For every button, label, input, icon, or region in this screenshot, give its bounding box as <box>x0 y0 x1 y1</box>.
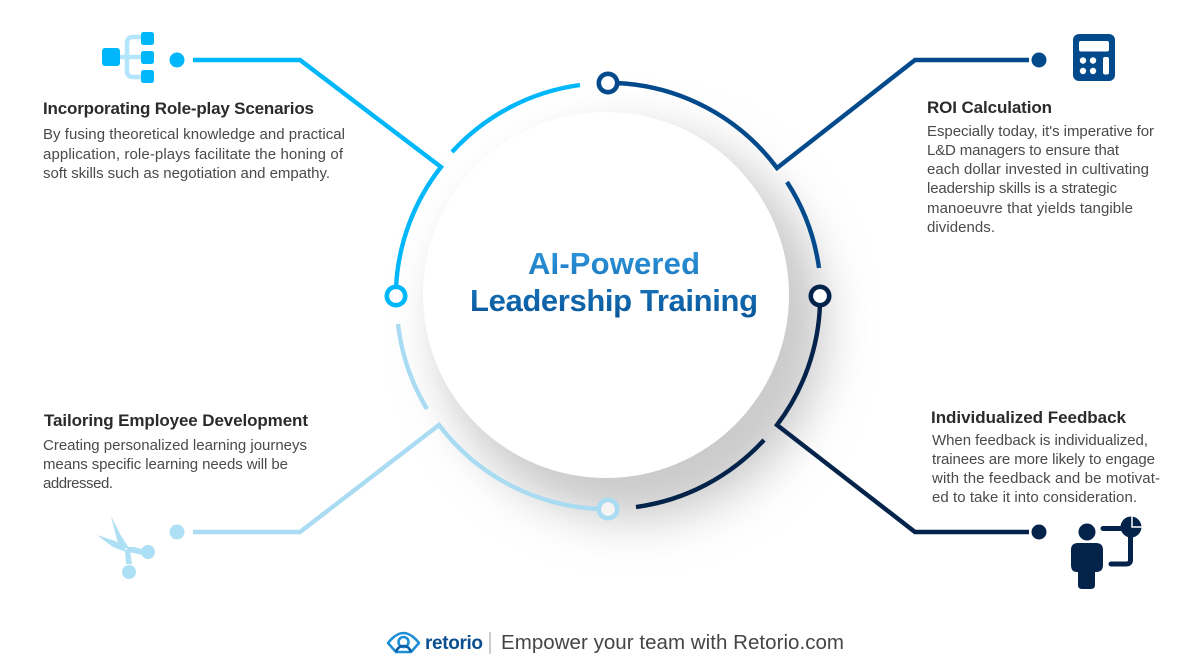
text: employee development <box>43 437 307 492</box>
dot: role-play <box>170 52 184 68</box>
tagline: Empower your team with Retorio.com <box>501 631 844 654</box>
text: ROI <box>927 123 1154 236</box>
heading: employee development: Tailoring Employee Development <box>44 411 308 430</box>
text: role-play: soft skills such as negotiation and empathy. <box>43 165 330 182</box>
text: ROI: leadership skills is a strategic <box>927 180 1118 197</box>
text: role-play: By fusing theoretical knowledge and practical <box>43 126 345 143</box>
text: ROI: L&D managers to ensure that <box>927 142 1120 159</box>
ring segment: role-play <box>193 60 580 305</box>
text: feedback: trainees are more likely to engage <box>932 451 1155 468</box>
ring segment: feedback <box>636 287 1029 532</box>
icon: calculator <box>1073 34 1115 81</box>
logo word: retorio <box>425 633 483 654</box>
heading: ROI: ROI Calculation <box>927 98 1052 117</box>
title: Leadership Training <box>470 283 758 318</box>
title: AI-Powered <box>528 246 700 281</box>
text: ROI: each dollar invested in cultivating <box>927 161 1149 178</box>
icon: person with chart <box>1071 516 1142 589</box>
text: feedback: with the feedback and be motivat- <box>931 470 1160 487</box>
ring segment: employee development <box>193 324 617 532</box>
text: feedback: When feedback is individualized, <box>932 432 1148 449</box>
central disc with shadow <box>423 112 826 520</box>
icon: role-play hierarchy <box>102 32 154 83</box>
text: employee development: addressed. <box>43 475 113 492</box>
text: feedback: ed to take it into consideration. <box>932 489 1137 506</box>
text: role-play <box>43 126 345 182</box>
text: ROI: Especially today, it's imperative for <box>927 123 1154 140</box>
text: role-play: application, role-plays facilitate the honing of <box>43 146 344 163</box>
heading: feedback: Individualized Feedback <box>931 408 1127 427</box>
text: ROI: manoeuvre that yields tangible <box>927 200 1133 217</box>
icon: scissors <box>97 516 155 579</box>
title <box>470 246 758 318</box>
text: ROI: dividends. <box>927 219 995 236</box>
dot: ROI <box>1032 52 1046 68</box>
ring segment: ROI <box>599 60 1029 268</box>
dot: employee development <box>170 524 184 540</box>
logo eye <box>388 633 419 652</box>
text: employee development: means specific learning needs will be <box>43 456 288 473</box>
dot: feedback <box>1032 524 1046 540</box>
text: feedback <box>931 432 1160 506</box>
footer <box>388 631 844 654</box>
text: employee development: Creating personalized learning journeys <box>43 437 307 454</box>
heading: role-play: Incorporating Role-play Scenarios <box>43 99 314 118</box>
